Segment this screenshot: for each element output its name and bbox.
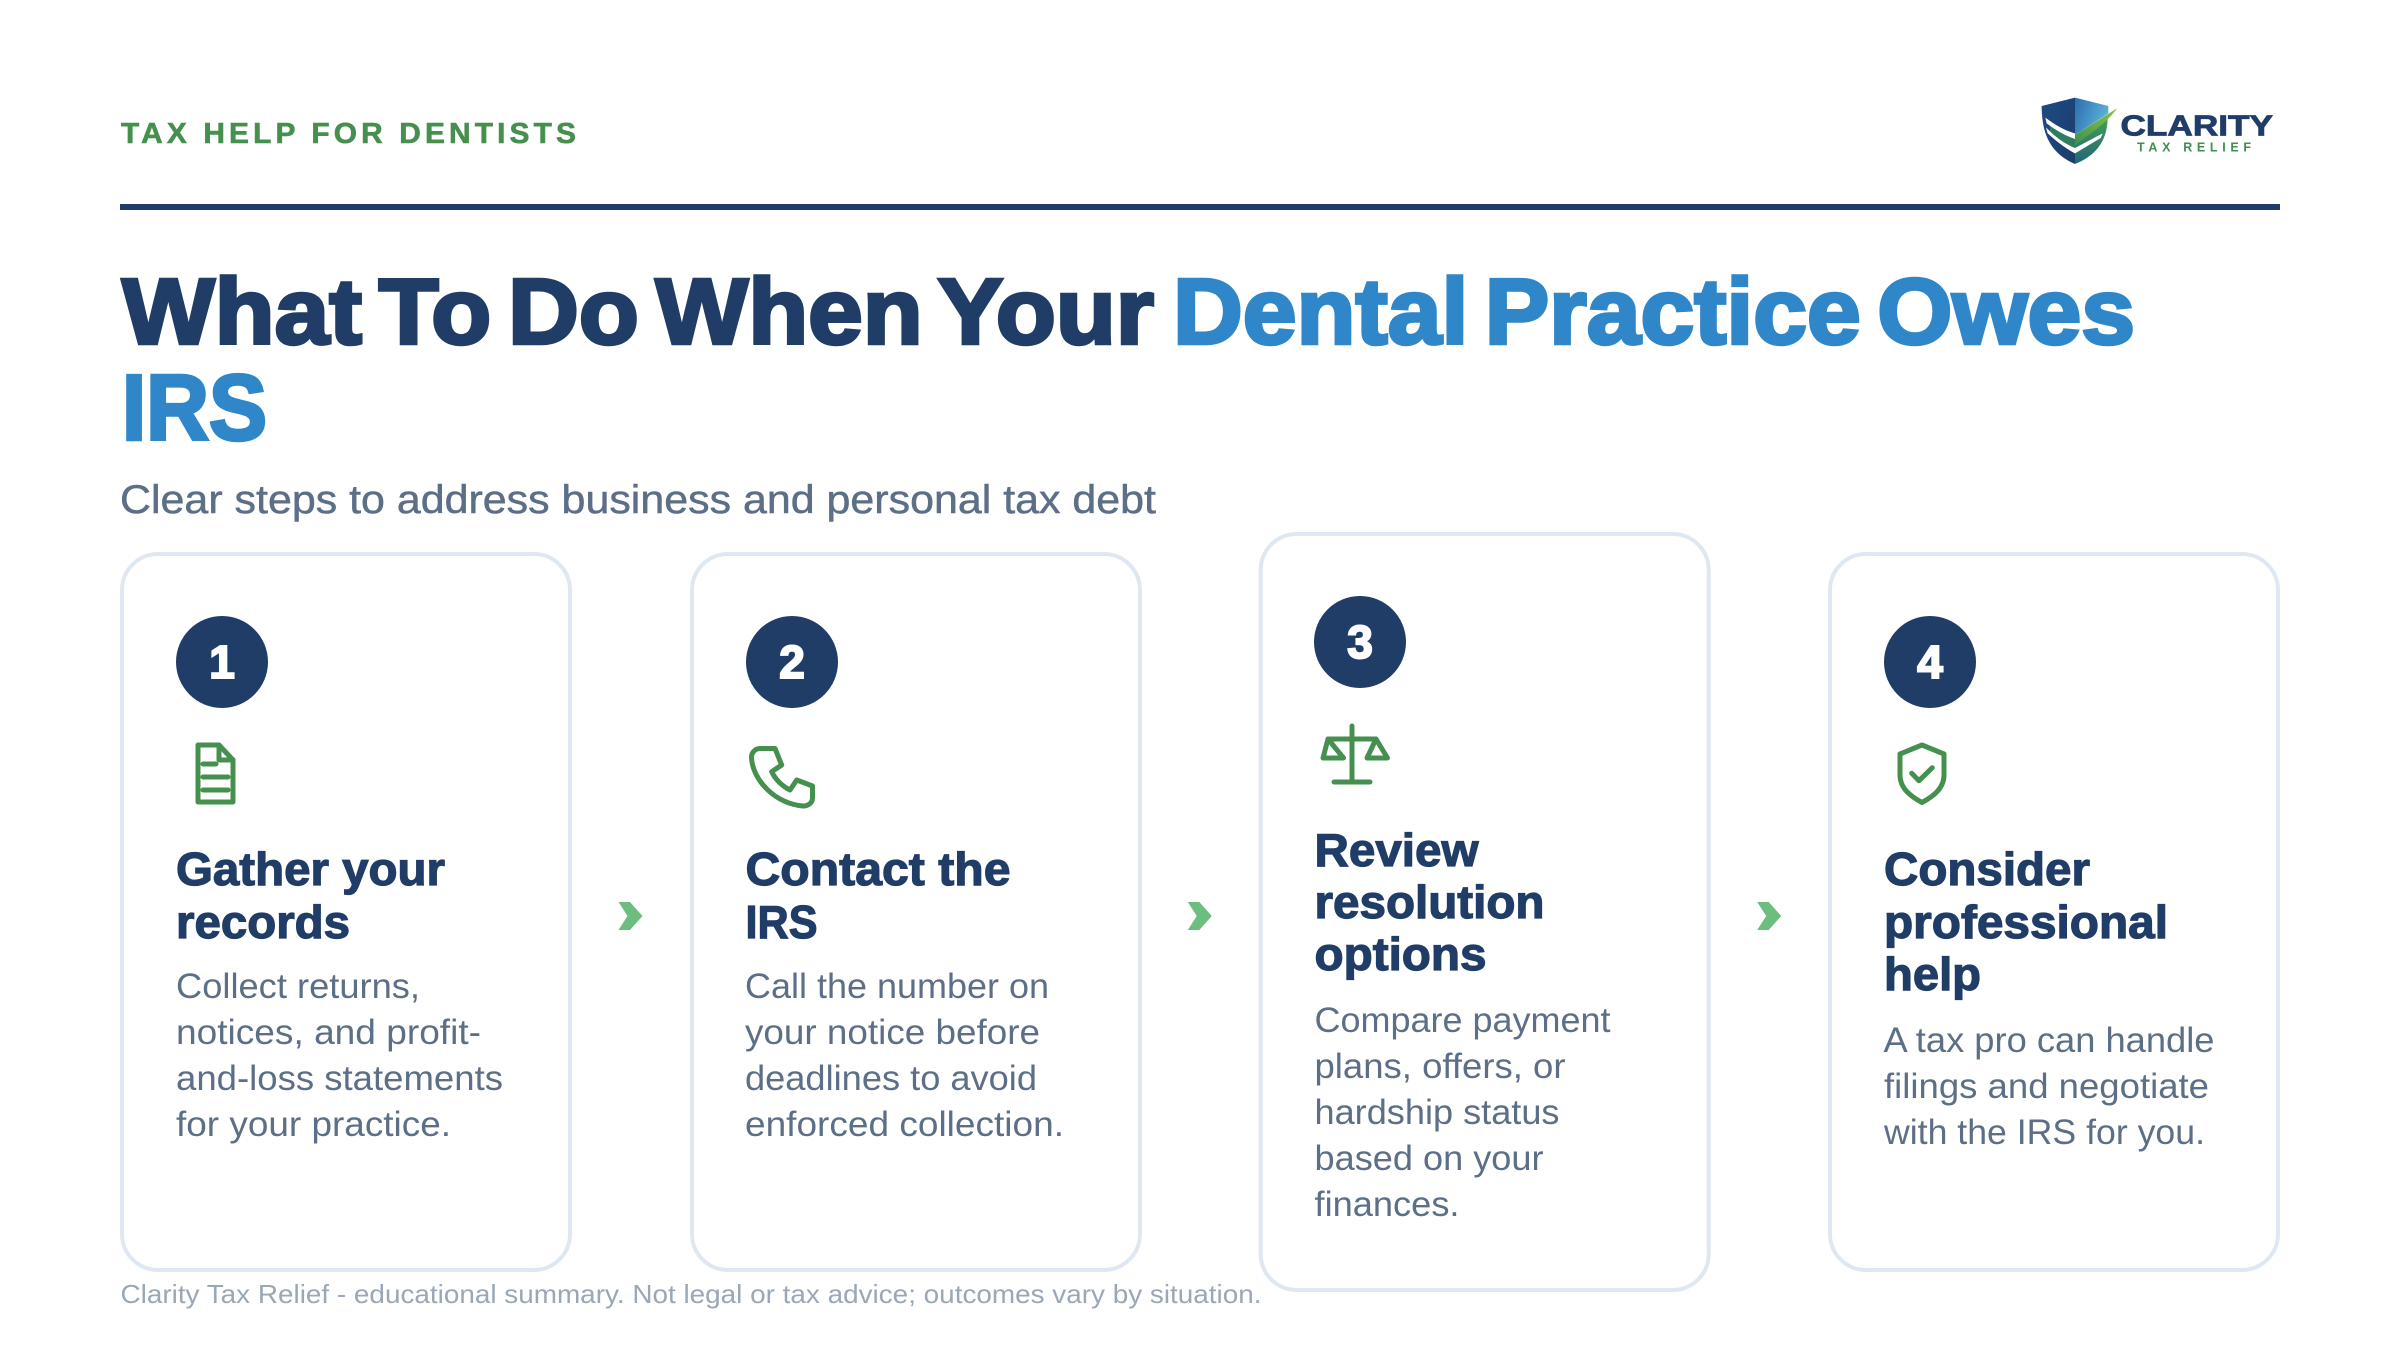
body text: plans, offers, or [1314,1047,1566,1086]
step number 1: 1 [209,636,235,688]
title line two blue: IRS [122,356,267,460]
heading: consider professional help: Consider [1884,843,2090,895]
step number 2: 2 [779,636,805,688]
body text: deadlines to avoid [745,1059,1037,1098]
step number 1 [176,616,268,708]
body text: based on your [1314,1139,1544,1178]
heading: consider professional help: help [1884,948,1981,1000]
step number 4: 4 [1917,636,1943,688]
body text: A tax pro can handle [1884,1021,2214,1060]
body text: Compare payment [1314,1001,1611,1040]
heading: review resolution options: options [1314,928,1486,980]
body text: Collect returns, [176,967,420,1006]
header rule [120,204,2280,210]
step number 2 [746,616,838,708]
heading: review resolution options: resolution [1314,876,1544,928]
body text: notices, and profit- [176,1013,481,1052]
heading: review resolution options [1314,824,1544,980]
icon: shield check [1900,745,1944,802]
title line one navy: What To Do When Your [122,260,1154,364]
heading: gather your records: records [176,896,350,948]
heading: consider professional help [1884,843,2168,1000]
logo wordmark: CLARITY [2120,110,2273,142]
body text [1314,1001,1611,1224]
logo tagline: TAX RELIEF [2137,140,2251,154]
body text [176,967,503,1144]
body text [1883,1021,2214,1152]
logo: Clarity Tax Relief [2042,98,2273,164]
title line one blue: Dental Practice Owes [1173,260,2135,364]
subtitle: Clear steps to address business and personal tax debt [120,478,1156,522]
body text: your notice before [745,1013,1040,1052]
arrow 3 [1757,902,1781,930]
body text: hardship status [1314,1093,1560,1132]
step number 3: 3 [1347,616,1373,668]
icon: scales [1323,726,1388,782]
body text: Call the number on [745,967,1049,1006]
title [122,260,2135,460]
body text [745,967,1064,1144]
heading: review resolution options: Review [1314,824,1479,876]
body text: with the IRS for you. [1883,1113,2205,1152]
panel: step 4 [1830,554,2278,1270]
arrow 1 [618,902,642,930]
step number 4 [1884,616,1976,708]
heading: contact the IRS [746,843,1010,948]
kicker: tax help for dentists: TAX HELP FOR DENTISTS [121,118,580,150]
heading: consider professional help: professional [1884,896,2168,948]
footer disclaimer: Clarity Tax Relief - educational summary. Not legal or tax advice; outcomes vary by situation. [120,1279,1262,1309]
heading: contact the IRS: IRS [746,896,818,948]
panel: step 3 [1261,534,1709,1290]
body text: enforced collection. [745,1105,1064,1144]
body text: and-loss statements [176,1059,503,1098]
icon: phone [751,748,812,806]
icon: document [198,745,233,802]
arrow 2 [1188,902,1212,930]
body text: finances. [1314,1185,1460,1224]
icon: logo shield [2042,98,2117,164]
heading: gather your records [176,843,445,948]
heading: gather your records: Gather your [176,843,445,895]
panel: step 1 [122,554,570,1270]
heading: contact the IRS: Contact the [746,843,1010,895]
body text: for your practice. [176,1105,451,1144]
body text: filings and negotiate [1884,1067,2209,1106]
step number 3 [1314,596,1406,688]
panel: step 2 [692,554,1140,1270]
